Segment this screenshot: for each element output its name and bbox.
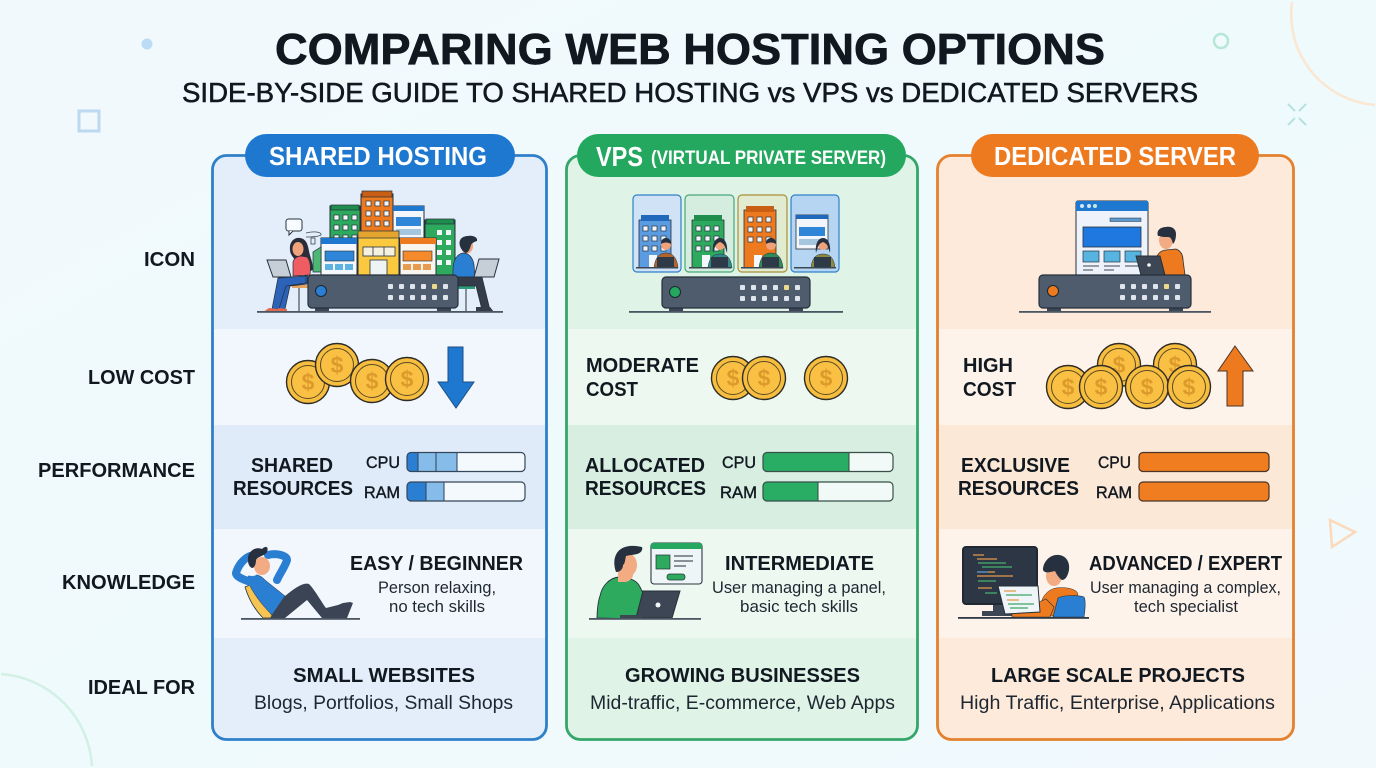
panel: shared hosting	[212, 134, 546, 740]
row label: low cost: LOW COST	[88, 367, 195, 389]
header pill: vps: (VIRTUAL PRIVATE SERVER)	[651, 148, 886, 169]
cpu and ram bars: dedicated	[1096, 452, 1269, 502]
knowledge text: dedicated: ADVANCED / EXPERT	[1089, 553, 1282, 575]
title: COMPARING WEB HOSTING OPTIONS	[275, 26, 1105, 74]
ideal for text: vps: GROWING BUSINESSES	[625, 665, 860, 687]
man with laptop	[453, 236, 499, 312]
partition: blue building	[633, 195, 681, 272]
illustration: dedicated server with web page and person	[1019, 201, 1211, 313]
resources label: allocated: ALLOCATED	[585, 455, 705, 477]
knowledge text: dedicated: tech specialist	[1134, 598, 1238, 616]
resources label: exclusive: RESOURCES	[958, 478, 1079, 500]
server	[1019, 275, 1211, 313]
resources label: exclusive: EXCLUSIVE	[961, 455, 1070, 477]
cost label: moderate	[586, 355, 699, 401]
knowledge text: vps: basic tech skills	[740, 598, 858, 616]
resources label: allocated: RESOURCES	[585, 478, 706, 500]
resources label: allocated	[585, 455, 706, 500]
row labels	[38, 249, 196, 699]
arrow: down	[438, 347, 474, 408]
server	[629, 277, 843, 313]
coins: moderate cost	[712, 356, 848, 400]
cost label: high	[963, 355, 1016, 401]
ideal for text: shared	[254, 665, 513, 714]
cpu and ram bars: vps: CPU	[722, 453, 756, 472]
illustration: tech specialist at monitor	[958, 547, 1089, 619]
knowledge text: dedicated: User managing a complex,	[1090, 579, 1281, 597]
illustration: user managing a panel	[589, 543, 702, 620]
cpu and ram bars: vps: RAM	[720, 483, 757, 502]
panel: dedicated server	[938, 134, 1294, 740]
header pill: shared hosting: SHARED HOSTING	[269, 141, 487, 171]
woman with laptop	[263, 238, 313, 312]
ideal for text: dedicated	[960, 665, 1275, 714]
row label: knowledge: KNOWLEDGE	[62, 572, 195, 594]
knowledge text: dedicated	[1089, 553, 1282, 616]
coins: low cost	[286, 344, 428, 404]
cpu and ram bars: dedicated: RAM	[1096, 483, 1132, 502]
partition: orange building	[738, 195, 787, 272]
ideal for text: vps	[590, 665, 895, 714]
resources label: shared: RESOURCES	[233, 478, 353, 500]
cost label: high: HIGH	[963, 355, 1013, 377]
knowledge text: shared: EASY / BEGINNER	[350, 553, 524, 575]
row label: ideal for: IDEAL FOR	[88, 677, 196, 699]
ideal for text: vps: Mid-traffic, E-commerce, Web Apps	[590, 693, 895, 714]
header pill: vps	[577, 134, 906, 177]
illustration: four virtual partitions on a server	[629, 195, 843, 313]
header pill: dedicated server	[971, 134, 1259, 177]
cpu and ram bars: dedicated: CPU	[1098, 453, 1131, 472]
cost label: high: COST	[963, 379, 1016, 401]
knowledge text: vps: INTERMEDIATE	[725, 553, 874, 575]
panel: vps	[566, 134, 918, 740]
cpu and ram bars: shared: CPU	[366, 453, 400, 472]
knowledge text: vps	[712, 553, 886, 616]
partition: web page	[791, 195, 839, 272]
illustration: relaxing person	[236, 547, 360, 620]
header pill: dedicated server: DEDICATED SERVER	[994, 141, 1236, 171]
knowledge text: vps: User managing a panel,	[712, 579, 886, 597]
knowledge text: shared	[350, 553, 524, 616]
ideal for text: shared: Blogs, Portfolios, Small Shops	[254, 693, 513, 714]
header pill: vps: VPS	[596, 141, 643, 172]
resources label: shared: SHARED	[251, 455, 333, 477]
knowledge text: shared: no tech skills	[389, 598, 485, 616]
resources label: exclusive	[958, 455, 1079, 500]
illustration: shared server with buildings and two people	[257, 191, 503, 313]
cpu and ram bars: shared	[364, 452, 525, 502]
partition: green building	[685, 195, 734, 272]
icon: chat bubble	[286, 219, 321, 244]
person at laptop	[1136, 227, 1185, 275]
row label: icon: ICON	[144, 249, 195, 271]
knowledge text: shared: Person relaxing,	[378, 579, 496, 597]
ideal for text: dedicated: LARGE SCALE PROJECTS	[991, 665, 1245, 687]
cost label: moderate: COST	[586, 379, 638, 401]
arrow: up	[1218, 346, 1253, 406]
cost label: moderate: MODERATE	[586, 355, 699, 377]
cpu and ram bars: shared: RAM	[364, 483, 400, 502]
cpu and ram bars: vps	[720, 452, 893, 502]
header pill: shared hosting	[245, 134, 515, 177]
coins: high cost	[1046, 344, 1210, 408]
ideal for text: dedicated: High Traffic, Enterprise, Applications	[960, 693, 1275, 714]
resources label: shared	[233, 455, 353, 500]
ideal for text: shared: SMALL WEBSITES	[293, 665, 475, 687]
subtitle: SIDE-BY-SIDE GUIDE TO SHARED HOSTING vs VPS vs DEDICATED SERVERS	[182, 77, 1198, 108]
row label: performance: PERFORMANCE	[38, 460, 195, 482]
server	[257, 275, 503, 313]
